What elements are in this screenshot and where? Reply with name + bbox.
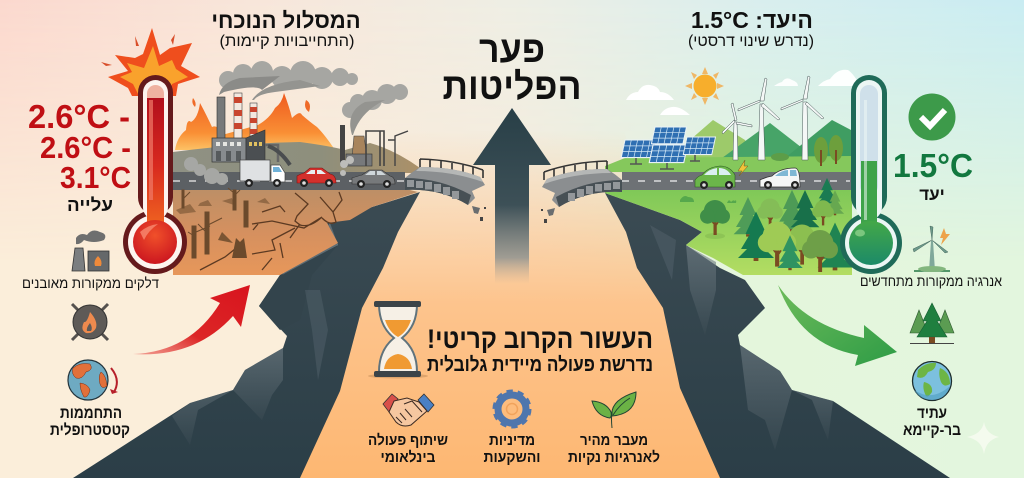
label: international cooperation: בינלאומי xyxy=(380,449,436,466)
wind turbines xyxy=(722,76,824,160)
clouds xyxy=(626,70,860,115)
label: sustainable future: בר-קיימא xyxy=(903,422,961,439)
upper grass xyxy=(605,156,851,173)
scene: polluted land xyxy=(173,61,420,275)
mountains xyxy=(680,120,851,158)
label: sustainable future xyxy=(903,405,961,439)
red car xyxy=(297,168,336,187)
thermometer: target xyxy=(840,75,902,274)
icon: fossil fuel plant xyxy=(72,231,109,271)
solar panels xyxy=(621,127,716,169)
icon: gear xyxy=(495,392,529,426)
hot temperature range xyxy=(28,98,131,215)
red arrow xyxy=(133,285,250,354)
title: gap xyxy=(442,29,582,107)
flames xyxy=(175,93,335,150)
label: international cooperation: שיתוף פעולה xyxy=(368,432,448,449)
road xyxy=(622,172,852,190)
label: policy and investments: והשקעות xyxy=(484,449,540,466)
label: sustainable future: עתיד xyxy=(917,405,947,422)
callout: critical decade: העשור הקרוב קריטי! xyxy=(427,324,653,354)
heading: current path xyxy=(211,8,361,50)
title: gap: הפליטות xyxy=(442,66,582,107)
icon: coal flame crossed xyxy=(72,304,108,340)
label: clean energy transition xyxy=(568,432,660,466)
label: policy and investments: מדיניות xyxy=(489,432,535,449)
target temperature: 1.5°C xyxy=(893,147,973,184)
scene: green land xyxy=(605,67,860,275)
left cliff xyxy=(73,192,420,478)
icon: handshake xyxy=(383,394,434,426)
icon: pine trees xyxy=(910,303,954,344)
sparkle xyxy=(967,422,999,454)
target temperature: יעד xyxy=(919,185,945,204)
gray car xyxy=(340,156,395,188)
green car xyxy=(695,160,748,189)
forest xyxy=(680,178,852,272)
upper round trees xyxy=(771,135,843,166)
heading: current path: (התחייבויות קיימות) xyxy=(220,33,354,50)
dead trees xyxy=(176,188,270,258)
icon: hourglass xyxy=(368,301,428,378)
target temperature xyxy=(893,147,973,204)
icon: hot globe xyxy=(68,360,118,400)
label: clean energy transition: מעבר מהיר xyxy=(580,432,648,449)
white car xyxy=(760,168,800,189)
heading: target: היעד: 1.5°C xyxy=(691,7,813,33)
left bridge xyxy=(405,159,486,221)
icon: healthy globe xyxy=(912,362,952,400)
hot temperature range: 3.1°C xyxy=(60,160,131,195)
hot temperature range: עלייה xyxy=(67,195,113,215)
hot temperature range: 2.6°C - xyxy=(40,130,131,165)
right cliff xyxy=(605,193,950,478)
heading: target: (נדרש שינוי דרסטי) xyxy=(688,33,814,50)
icon: leaves xyxy=(592,392,636,428)
upper land xyxy=(173,142,420,173)
icon: check badge xyxy=(908,94,956,140)
callout: critical decade xyxy=(427,324,653,376)
label: policy and investments xyxy=(484,432,540,466)
icon: renewable turbine xyxy=(913,226,950,272)
road xyxy=(173,172,405,190)
label: clean energy transition: לאנרגיות נקיות xyxy=(568,449,660,466)
heading: current path: המסלול הנוכחי xyxy=(211,8,361,33)
title: gap: פער xyxy=(479,29,545,70)
cracked dirt xyxy=(173,190,418,275)
burst xyxy=(108,28,200,96)
label: international cooperation xyxy=(368,432,448,466)
label: catastrophic warming: קטסטרופלית xyxy=(50,422,130,439)
label: catastrophic warming: התחממות xyxy=(60,405,122,422)
lower grass xyxy=(605,190,852,275)
truck and smoke xyxy=(184,157,285,187)
center up arrow xyxy=(473,108,551,284)
green arrow xyxy=(778,285,897,366)
heading: target xyxy=(688,7,814,50)
smoke clouds xyxy=(219,61,408,135)
label: catastrophic warming xyxy=(50,405,130,439)
label: renewables: אנרגיה ממקורות מתחדשים xyxy=(860,273,1002,289)
label: fossil fuels: דלקים ממקורות מאובנים xyxy=(22,275,159,291)
callout: critical decade: נדרשת פעולה מיידית גלובלית xyxy=(427,354,653,376)
sun xyxy=(685,67,724,105)
hot temperature range: 2.6°C - xyxy=(28,98,130,135)
right bridge xyxy=(541,161,622,223)
thermometer: hot xyxy=(101,28,200,274)
factories xyxy=(212,93,408,166)
